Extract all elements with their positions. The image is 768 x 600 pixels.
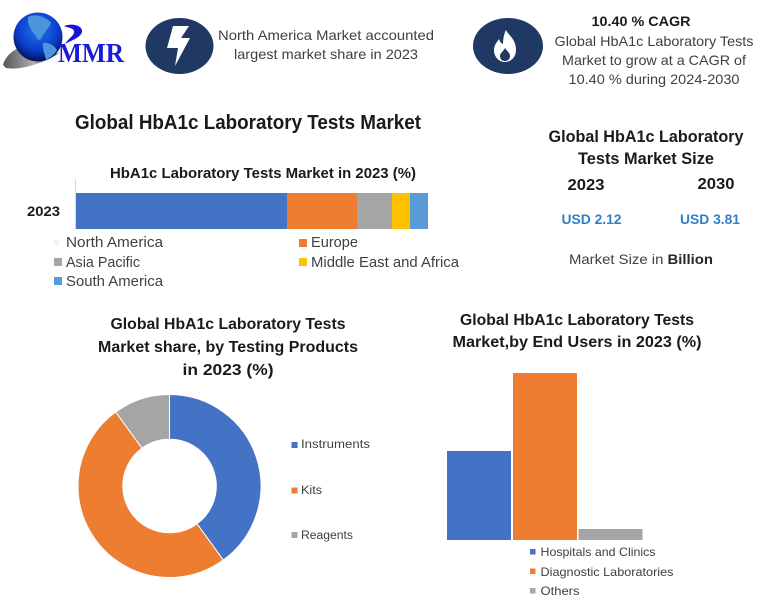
panel: market size: 2023 [568, 177, 605, 194]
panel: market size: Global HbA1c Laboratory [548, 128, 744, 146]
stacked bar chart [27, 179, 428, 229]
panel: market size: 2030 [698, 176, 735, 193]
heading: donut chart [98, 316, 358, 379]
callout: North America share, line 2: largest market share in 2023 [234, 46, 418, 62]
legend: end users [530, 545, 674, 598]
title: Global HbA1c Laboratory Tests Market [75, 112, 421, 134]
heading: stacked bar chart: HbA1c Laboratory Tests Market in 2023 (%) [110, 166, 416, 182]
legend: regions: South America [66, 274, 164, 290]
heading: CAGR: 10.40 % CAGR [592, 13, 690, 29]
legend: testing products [292, 439, 370, 542]
stacked bar chart: 2023 [27, 203, 60, 219]
panel: market size: Market Size in Billion [569, 251, 713, 267]
text block: CAGR description: Global HbA1c Laboratory Tests [554, 33, 754, 49]
text block: CAGR description: 10.40 % during 2024-2030 [568, 71, 740, 87]
legend: regions [54, 235, 460, 290]
legend: testing products: Kits [301, 485, 322, 497]
text block: CAGR description: Market to grow at a CAGR of [562, 52, 746, 68]
bar chart: end users [447, 373, 642, 540]
text block: CAGR description [554, 33, 754, 87]
donut chart [78, 394, 261, 577]
legend: testing products: Reagents [301, 530, 353, 542]
legend: regions: Middle East and Africa [311, 255, 460, 271]
icon: lightning bolt [146, 18, 214, 74]
legend: regions: Europe [311, 235, 358, 251]
heading: end users chart: Global HbA1c Laboratory Tests [460, 312, 694, 329]
legend: testing products: Instruments [301, 439, 370, 451]
icon: flame [473, 18, 543, 74]
legend: end users: Diagnostic Laboratories [540, 565, 674, 579]
logo: MMR globe: MMR [58, 38, 124, 68]
legend: regions: Asia Pacific [66, 255, 140, 271]
legend: end users: Others [540, 584, 580, 598]
panel: market size: USD 3.81 [680, 212, 741, 227]
panel: market size: USD 2.12 [562, 212, 622, 227]
panel: market size: Tests Market Size [578, 150, 714, 168]
legend: end users: Hospitals and Clinics [540, 545, 656, 559]
panel: market size [548, 128, 744, 267]
legend: regions: North America [66, 235, 164, 251]
heading: end users chart: Market,by End Users in 2023 (%) [452, 334, 702, 351]
heading: donut chart: in 2023 (%) [182, 362, 274, 379]
heading: donut chart: Market share, by Testing Products [98, 339, 358, 356]
callout: North America share: North America Market accounted [218, 27, 434, 43]
heading: end users chart [452, 312, 702, 351]
heading: donut chart: Global HbA1c Laboratory Tests [110, 316, 346, 333]
logo: MMR globe [3, 12, 124, 69]
